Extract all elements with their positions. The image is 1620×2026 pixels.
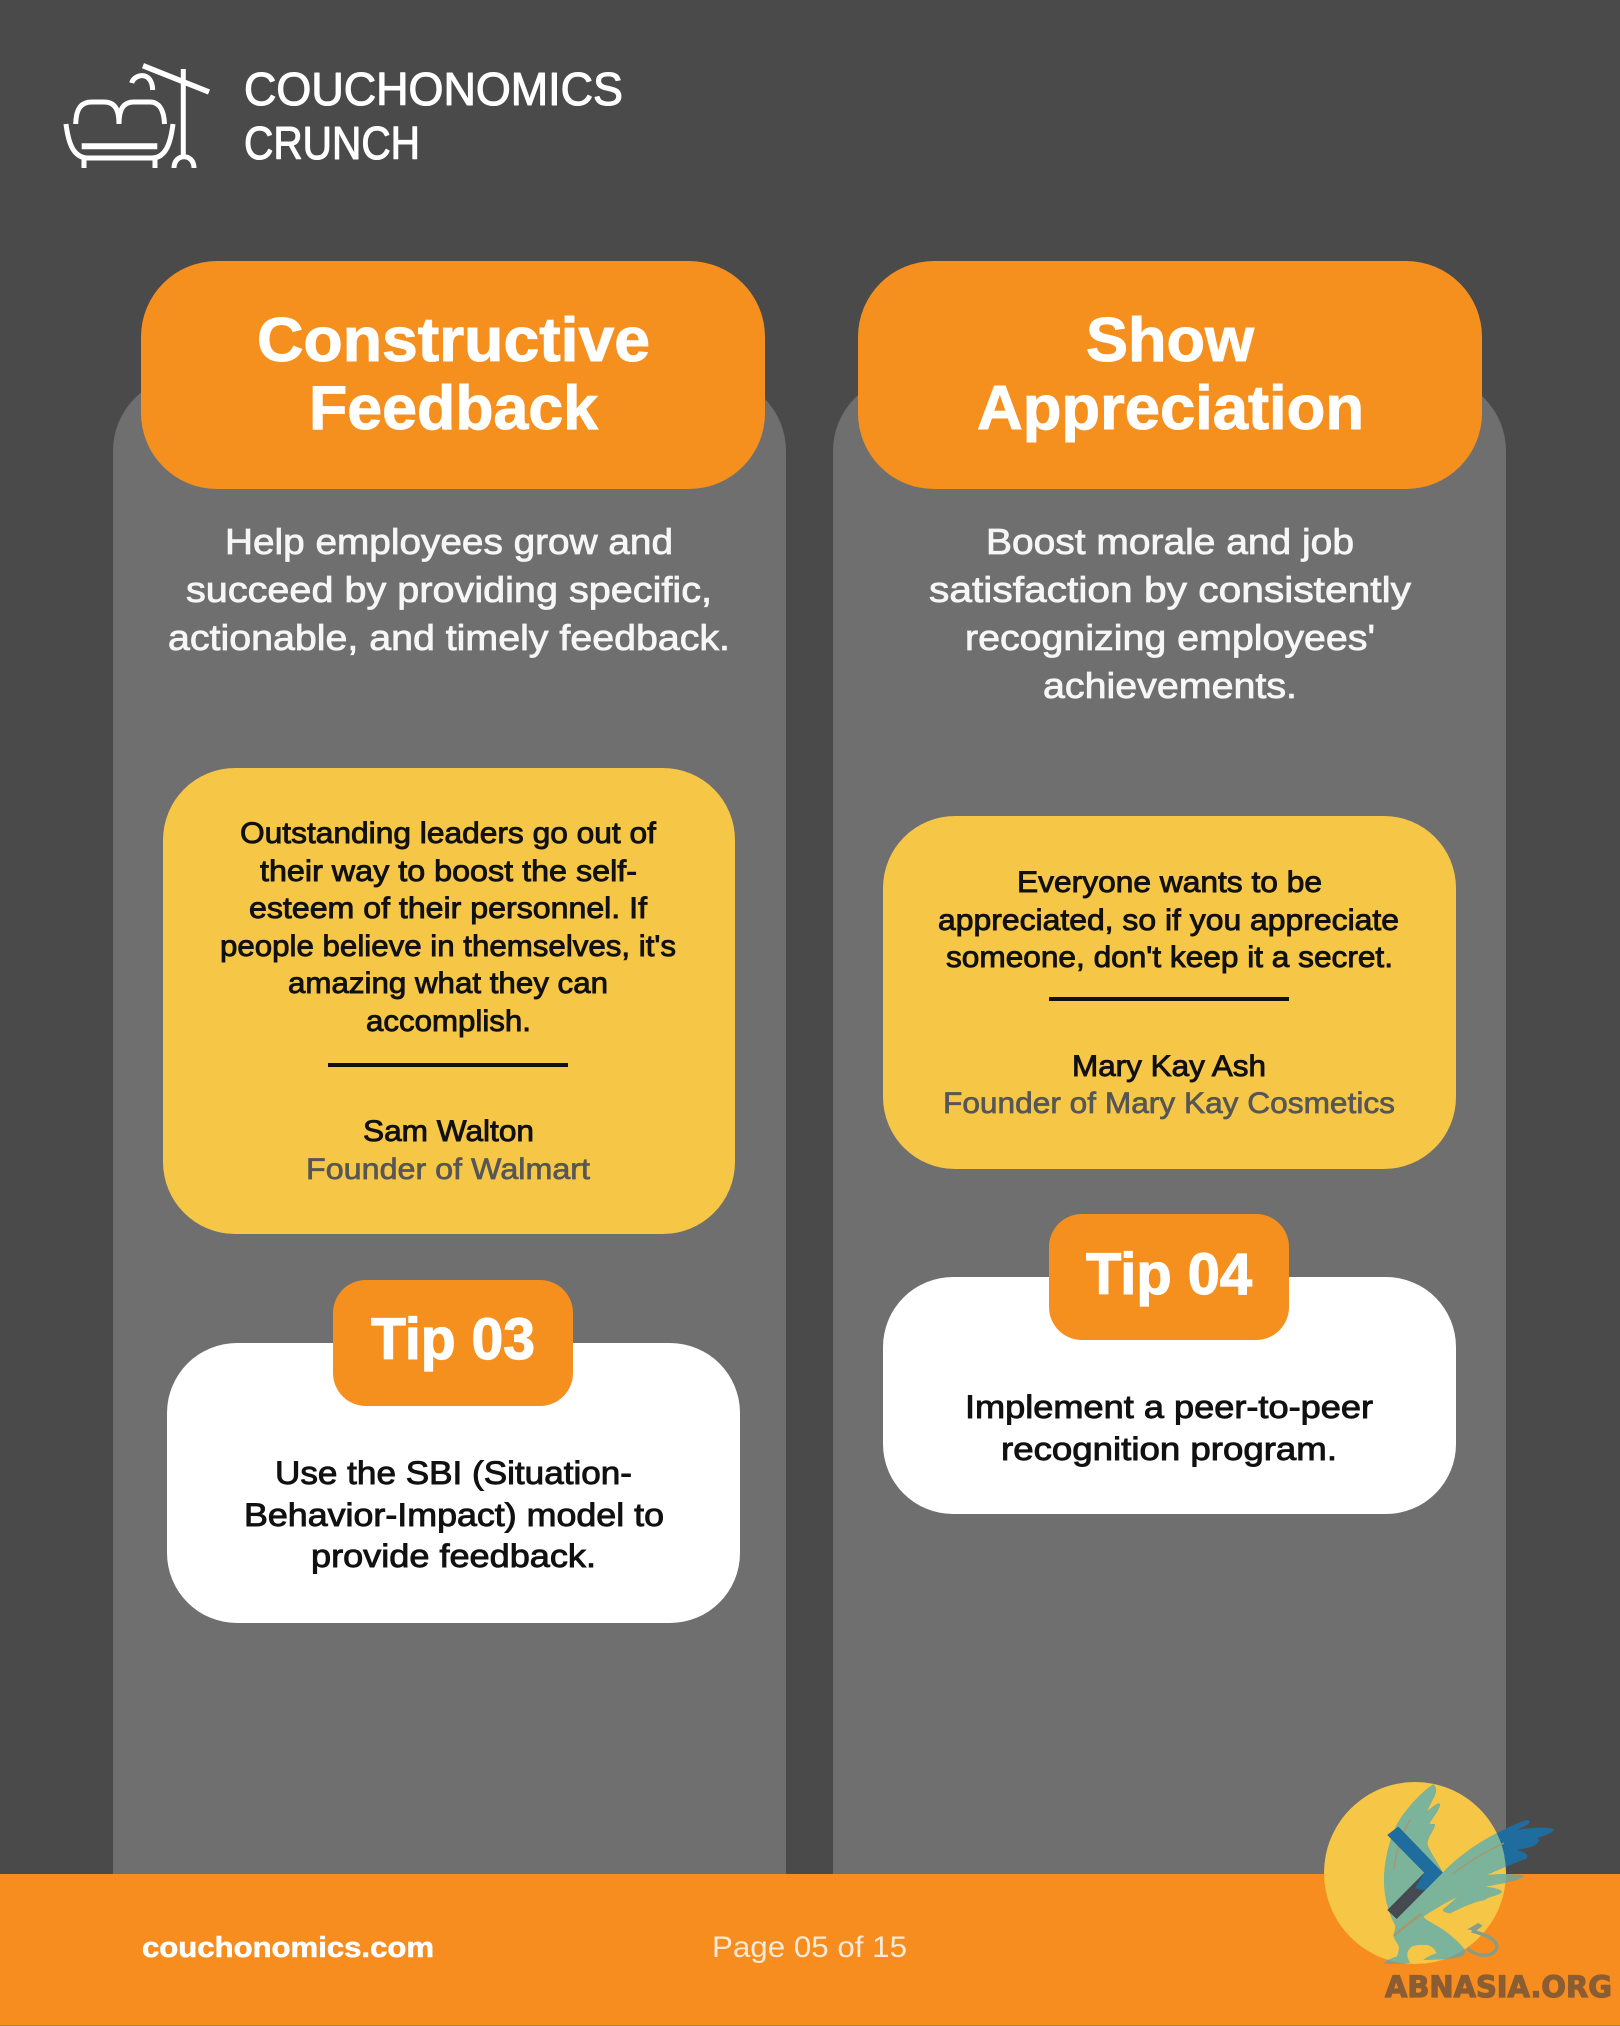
callout: Mary Kay Ash quote: Founder of Mary Kay Cosmetics [943, 1087, 1395, 1120]
tip card: Tip 04: recognition program. [1001, 1431, 1337, 1467]
callout: Sam Walton quote: Sam Walton [363, 1115, 534, 1148]
callout: Mary Kay Ash quote [883, 816, 1456, 1169]
footer page number: Page 05 of 15 [712, 1931, 907, 1964]
callout: Sam Walton quote: Founder of Walmart [306, 1153, 591, 1186]
tip card: Tip 03: Behavior-Impact) model to [244, 1497, 664, 1533]
watermark text: ABNASIA.ORG [1385, 1970, 1612, 2004]
icon: couch and floor lamp [66, 66, 209, 168]
heading: show appreciation: Appreciation [977, 374, 1364, 443]
callout: Sam Walton quote: people believe in themselves, it's [220, 930, 676, 963]
yellow disc [1324, 1782, 1506, 1964]
panel: show appreciation [833, 376, 1506, 1976]
icon: griffin emblem watermark [1324, 1782, 1612, 2004]
callout: Mary Kay Ash quote: Mary Kay Ash [1072, 1050, 1266, 1083]
callout: Sam Walton quote: their way to boost the self- [260, 855, 637, 888]
text block: feedback description: Help employees grow and [225, 521, 673, 562]
tip card: Tip 03: provide feedback. [311, 1538, 596, 1574]
griffin: wing tips over dark background [1384, 1784, 1554, 1873]
footer website: couchonomics.com [142, 1932, 434, 1964]
tip card: Tip 03: Use the SBI (Situation- [275, 1455, 632, 1491]
chevron mark [1387, 1827, 1443, 1919]
panel: constructive feedback [113, 376, 786, 1976]
text block: feedback description [168, 521, 730, 658]
logo wordmark [244, 63, 623, 169]
text block: feedback description: succeed by providing specific, [186, 569, 712, 610]
text block: appreciation description [929, 521, 1411, 706]
tip card: Tip 04 [883, 1214, 1456, 1514]
callout: Mary Kay Ash quote: someone, don't keep it a secret. [946, 941, 1393, 974]
griffin: body inside the disc [1384, 1784, 1506, 1964]
griffin: parts over orange band [1384, 1873, 1524, 1964]
text block: appreciation description: satisfaction by consistently [929, 569, 1411, 610]
badge: Tip 04 [1049, 1214, 1289, 1340]
heading: show appreciation: Show [1086, 306, 1255, 375]
heading: constructive feedback: Constructive [257, 306, 650, 375]
logo wordmark: CRUNCH [244, 117, 420, 169]
callout: Sam Walton quote: amazing what they can [288, 967, 608, 1000]
logo: Couchonomics Crunch [66, 63, 623, 169]
callout: Mary Kay Ash quote: Everyone wants to be [1017, 866, 1322, 899]
callout: Sam Walton quote: esteem of their personnel. If [249, 892, 648, 925]
logo wordmark: COUCHONOMICS [244, 63, 623, 115]
tip card: Tip 04: Implement a peer-to-peer [965, 1389, 1373, 1425]
callout: Sam Walton quote: accomplish. [366, 1005, 531, 1038]
callout: Mary Kay Ash quote: appreciated, so if you appreciate [938, 904, 1399, 937]
tip card: Tip 03 [167, 1280, 740, 1623]
griffin tail [1467, 1923, 1497, 1955]
callout: Sam Walton quote [163, 768, 735, 1234]
heading: constructive feedback: Feedback [309, 374, 599, 443]
text block: appreciation description: achievements. [1043, 665, 1297, 706]
footer band [0, 1874, 1620, 2026]
callout: Sam Walton quote: Outstanding leaders go out of [240, 817, 657, 850]
badge: Tip 03: Tip 03 [371, 1307, 535, 1372]
text block: appreciation description: Boost morale and job [986, 521, 1354, 562]
feather streaks [1394, 1820, 1503, 1935]
badge: Tip 03 [333, 1280, 573, 1406]
badge: Tip 04: Tip 04 [1086, 1242, 1252, 1307]
text block: appreciation description: recognizing employees' [965, 617, 1375, 658]
heading: constructive feedback [141, 261, 765, 489]
heading: show appreciation [858, 261, 1482, 489]
text block: feedback description: actionable, and timely feedback. [168, 617, 730, 658]
